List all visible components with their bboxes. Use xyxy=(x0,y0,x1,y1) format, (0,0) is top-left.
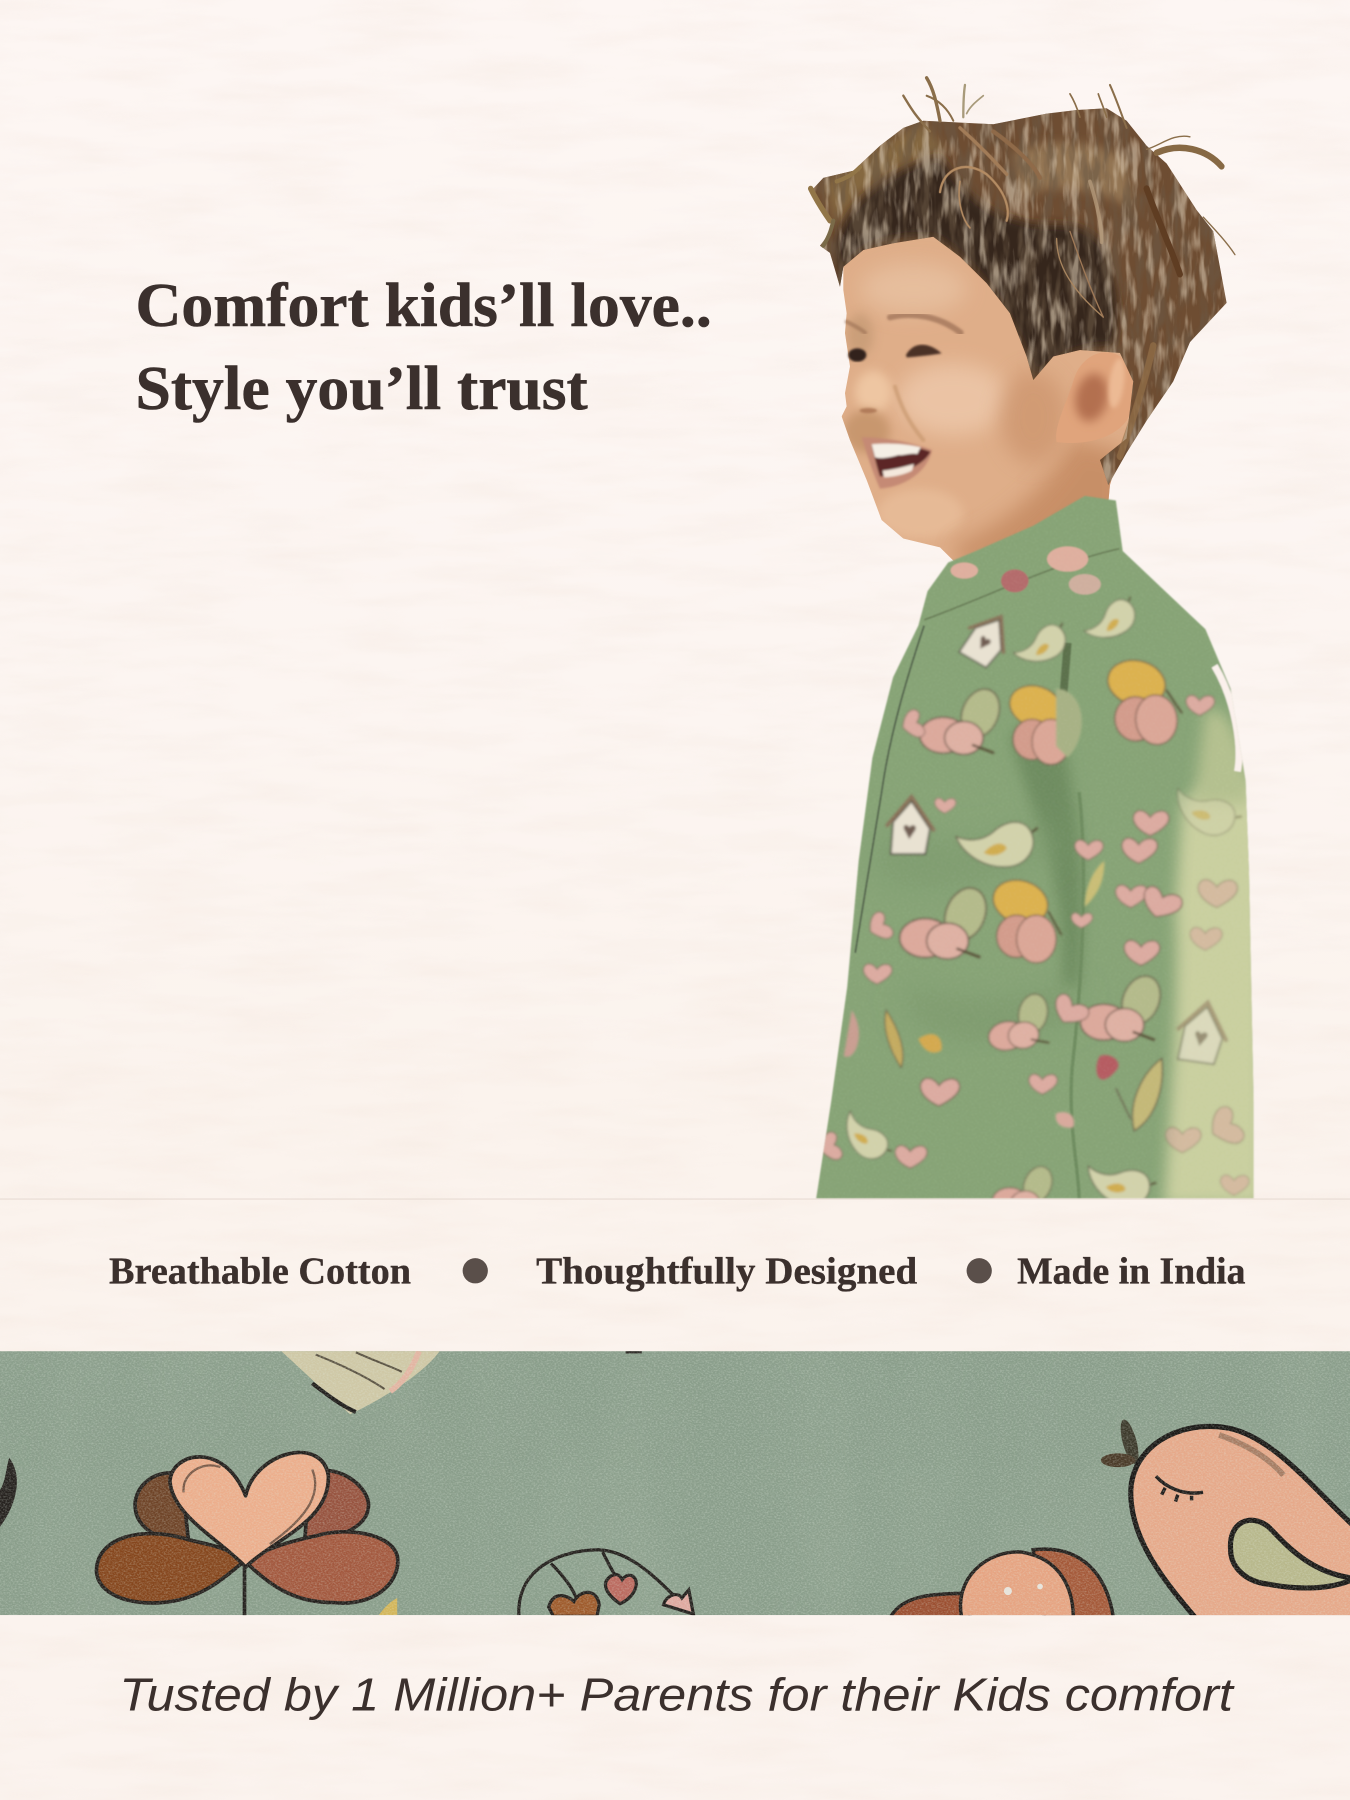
heart sprig xyxy=(519,1550,693,1616)
collar motifs xyxy=(951,546,1101,595)
facial details xyxy=(847,315,961,489)
small leaf xyxy=(379,1598,397,1615)
section divider xyxy=(0,1198,1350,1200)
smile xyxy=(862,437,932,489)
feature: thoughtfully designed: Thoughtfully Designed xyxy=(536,1250,917,1292)
headline: Comfort kids’ll love.. xyxy=(135,272,712,340)
pale sleeve motifs xyxy=(1165,778,1249,1195)
butterfly at bottom xyxy=(890,1549,1114,1619)
heart flower xyxy=(96,1452,398,1616)
print motifs on chest and sleeve xyxy=(816,593,1249,1216)
dark hair front xyxy=(835,156,1117,378)
fabric close-up band xyxy=(0,1351,1350,1619)
fabric weave overlay xyxy=(0,1351,1350,1615)
trust line: Tusted by 1 Million+ Parents for their Kids comfort xyxy=(119,1668,1235,1720)
ear xyxy=(1056,352,1134,443)
eyes xyxy=(848,345,942,362)
neck and face xyxy=(842,236,1130,561)
feature row xyxy=(109,1250,1246,1292)
shirt xyxy=(804,494,1263,1216)
strand texture xyxy=(816,108,1222,462)
shirt fabric grain xyxy=(886,680,1108,1046)
brows xyxy=(847,315,961,333)
feature: made in india: Made in India xyxy=(1017,1250,1246,1292)
hair tan patches xyxy=(823,122,947,228)
headline xyxy=(135,272,712,423)
separator dot xyxy=(463,1258,488,1283)
bird xyxy=(1101,1418,1350,1619)
hair strands xyxy=(940,128,1180,456)
feature: breathable cotton: Breathable Cotton xyxy=(109,1250,411,1292)
headline: Style you’ll trust xyxy=(135,355,588,423)
hair xyxy=(807,78,1240,492)
leaf tip at top xyxy=(281,1351,642,1414)
separator dot xyxy=(967,1258,992,1283)
head, traced in enlarged coordinates xyxy=(807,78,1240,578)
hair wisps xyxy=(811,78,1235,255)
nose shading xyxy=(860,387,923,440)
boy photo illustration xyxy=(804,78,1263,1216)
left edge motif xyxy=(0,1458,17,1527)
